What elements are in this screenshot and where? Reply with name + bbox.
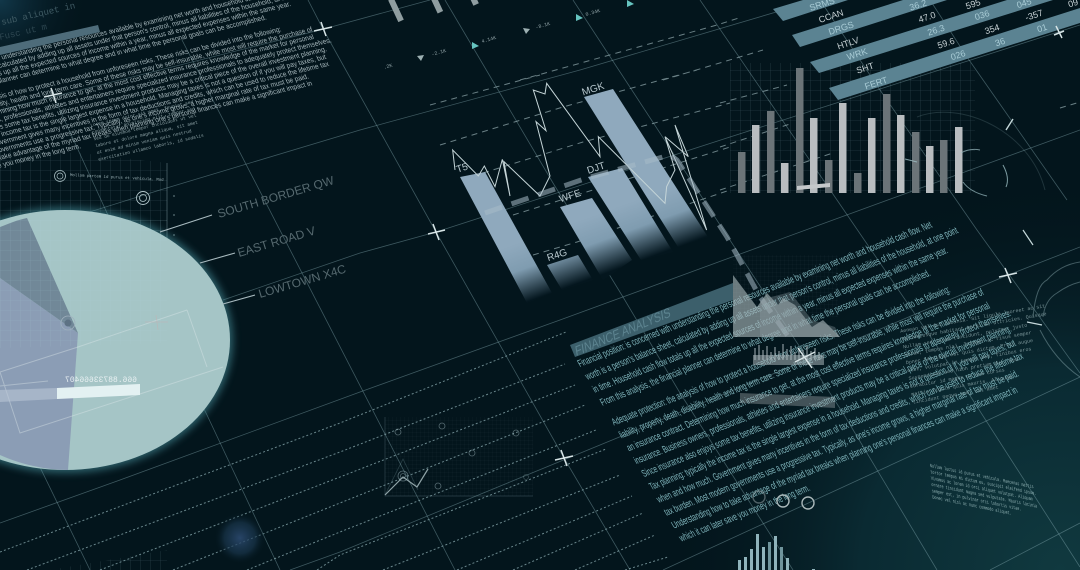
top-left mono text block xyxy=(90,98,205,163)
bar labels xyxy=(455,81,607,264)
ring icons xyxy=(753,491,814,509)
dotted perspective lines xyxy=(0,332,668,570)
top-left mono text block: Lorem ipsum dolor sit amet, feugiat sed xyxy=(90,99,194,129)
finance text block: tax burden. Most modern governments use a progressive tax. Typically, as one's income grows, a higher marginal rate of tax must be paid. xyxy=(662,367,1021,518)
overlay frame on pie xyxy=(0,310,223,433)
bottom mini bars xyxy=(738,534,815,570)
zigzag line xyxy=(453,83,707,230)
pie base slice xyxy=(0,210,230,470)
pie chart xyxy=(0,207,233,473)
overlay grid on pie xyxy=(0,220,167,348)
finance text block: Adequate protection: the analysis of how to protect a household from unforeseen risks. These risks can be divided into the following: xyxy=(609,283,952,428)
mirrored readout: 666.88733666407 xyxy=(65,376,137,385)
right mono text block: Curabitur id magna ut sem cursus xyxy=(910,367,1005,390)
right mono text block: tincidunt neque sem, sit amet xyxy=(912,385,999,406)
finance text block: Financial position: is concerned with understanding the personal resources available by examining net worth and household cash flow. Net xyxy=(575,219,934,369)
finance text block: in time. Household cash flow totals up all the expected sources of income within a year, minus all expected expenses within the same year. xyxy=(590,244,950,395)
bar labels: MGK xyxy=(581,81,606,98)
top-left skewed text block xyxy=(0,0,350,184)
right mono text block: Pellentesque habitant morbi et ultricies. Quisque xyxy=(901,311,1047,343)
bars xyxy=(460,89,708,303)
crosshair markers xyxy=(44,22,1064,466)
lower centre scatter panel xyxy=(385,417,533,496)
right mono text block: Suspendisse sed nibh pretium dui. Sed xyxy=(908,357,1019,382)
bottom-right mono text block: tortor tempus mi dictum eu, suscipit eleifend ipsum. xyxy=(930,470,1036,497)
finance analysis heading xyxy=(570,283,733,359)
mountain area chart xyxy=(733,255,840,337)
top-left mono text block: sed do eiusmod tempor incididunt ut vel xyxy=(93,113,197,142)
data table: skewed rows: FERT xyxy=(863,75,889,92)
data table: skewed rows: DRGS xyxy=(827,19,855,37)
right mono text block: mattis ligula quis mauris. Aliquam xyxy=(911,374,1013,398)
pie labels and leaders: EAST ROAD V xyxy=(236,224,317,260)
top-left mono text block: consectetur adipiscing elit, tempor sed xyxy=(91,106,196,136)
finance text block: an insurance contract. Determining how much insurance to get, at the most cost effective terms requires knowledge of the market for personal xyxy=(624,300,992,453)
finance text block: Since insurance also enjoys some tax benefits, utilizing insurance investment products may be a critical piece of the overall investment planning. xyxy=(639,323,1013,479)
left grid panel: Mollom partem id purus et vehicula. Mod xyxy=(70,173,164,183)
data table: skewed rows xyxy=(773,0,1080,100)
top ticker: arrows and values: 0.34K xyxy=(585,8,601,18)
top ticker: arrows and values: 4.14K xyxy=(481,35,497,45)
data table: skewed rows: -357 xyxy=(1024,8,1044,23)
lens flare xyxy=(214,512,266,564)
right mono text block: vitae, tempus nisi. Integer ac risus semper xyxy=(904,330,1032,358)
top-left header strip: sub aliquet in xyxy=(0,1,76,28)
thick dashed band xyxy=(485,155,793,343)
data table: skewed rows: HTLV xyxy=(836,35,860,51)
right mono text block xyxy=(900,303,1058,406)
data table: skewed rows: SHT xyxy=(855,60,876,76)
right mono text block: Nullam sed lorem tincidunt, pulvinar justo xyxy=(903,323,1028,350)
bar labels: R4G xyxy=(546,247,569,264)
finance text block: Tax planning: typically the income tax is the single largest expense in a household. Managing taxes is not a question of if you will pay taxes, but xyxy=(647,337,1018,492)
bar labels: WFE xyxy=(558,188,583,205)
pie labels and leaders: SOUTH BORDER QW xyxy=(216,173,336,221)
top-left mono text block: exercitation ullamco laboris, id sodalis xyxy=(98,133,205,163)
data table: skewed rows: 01 xyxy=(1036,22,1048,34)
centre bar chart xyxy=(453,81,793,343)
dashed lines behind centre chart xyxy=(430,17,1080,255)
top-left header strip xyxy=(0,1,100,55)
finance text block: Understanding how to take advantage of the myriad tax breaks when planning one's personal finances can make a significant impact in xyxy=(669,384,1020,531)
bar labels: DJT xyxy=(586,161,607,177)
left grid panel xyxy=(0,150,175,348)
pie labels and leaders xyxy=(160,173,348,304)
top-left mono text block: labore et dolore magna aliqua, sit amet xyxy=(95,120,199,149)
radar arcs xyxy=(905,112,1080,377)
finance text block: liability, property, death, disability, health and long term care. Some of these risks may be self-insurable, while most will require the purchase of xyxy=(617,286,986,440)
data table: skewed rows: 47.0 xyxy=(917,10,937,25)
blurred strip over text xyxy=(740,393,835,408)
finance text block: From this analysis, the financial planner can determine to what degree and in what time the personal goals can be accomplished. xyxy=(598,267,933,408)
data table: skewed rows: 59.6 xyxy=(936,36,956,51)
pie slice: purple xyxy=(0,278,78,470)
data table: skewed rows: 354 xyxy=(983,22,1001,36)
top ticker: arrows and values: .2K xyxy=(383,63,393,71)
data table: skewed rows: WRK xyxy=(846,46,869,62)
data table: skewed rows: 26.3 xyxy=(926,23,946,38)
right bar chart xyxy=(730,63,975,193)
bar labels: T5 xyxy=(455,161,470,176)
bottom-left mini grid xyxy=(50,550,167,570)
bottom-right mono text block: Donec vel nisi ac nunc commodo aliquet. xyxy=(932,495,1012,517)
finance text block: when and how much. Government gives many incentives in the form of tax deductions and credits, which can be used to reduce the lifetime tax xyxy=(653,350,1026,505)
panel line chart xyxy=(385,469,428,495)
data table: skewed rows: 36 xyxy=(994,36,1006,48)
right mono text block: Aenean vel dui lacinia. Sit ligula laoreet ac sit xyxy=(900,303,1046,335)
pie glow xyxy=(0,207,233,473)
bottom-right mono text block: Vivamus ac lorem id orci aliquet volutpat. Aliquam xyxy=(931,476,1033,503)
top ticker: arrows and values xyxy=(383,0,634,71)
finance text block: which it can later save you money in the long term. xyxy=(676,482,812,544)
finance text block: insurance. Business owners, professionals, athletes and entertainers require specialized insurance professionals to adequately protect themselves. xyxy=(632,307,1013,466)
finance analysis heading: FINANCE ANALYSIS xyxy=(574,304,672,359)
top ticker: arrows and values: -8.1K xyxy=(535,21,551,31)
right mono text block: Donec faucibus est quis dictum. Proin augue xyxy=(905,338,1034,366)
finance text block: worth is a person's balance sheet, calculated by adding up all assets under that person's control, minus all liabilities of the household, at one point xyxy=(582,224,961,382)
data table: skewed rows: 026 xyxy=(949,48,967,62)
pie labels and leaders: LOWTOWN X4C xyxy=(257,262,348,301)
right mono text block: elit, volutpat in tempor sed, finibus eros xyxy=(907,346,1032,374)
bottom-right mono text block xyxy=(930,464,1039,523)
top-left mono text block: ut enim ad minim veniam quis nostrud xyxy=(96,128,193,156)
finance text block xyxy=(574,210,1058,544)
bottom-right mono text block: ornare tincidunt magna sed vulputate. Mauris lacinia xyxy=(931,482,1038,510)
highlight bar xyxy=(0,384,140,402)
bottom-right mono text block: semper est, in pulvinar orci lobortis vitae. xyxy=(932,489,1022,513)
data table: skewed rows: CCAN xyxy=(817,7,845,25)
top ticker: arrows and values: -2.1K xyxy=(431,48,447,58)
data table: skewed rows: 036 xyxy=(973,8,991,22)
pie slice: slate xyxy=(0,218,78,333)
bottom-right mono text block: Nullam luctus id purus et vehicula. Maecenas mattis xyxy=(930,464,1034,491)
mini spike chart xyxy=(753,344,824,365)
